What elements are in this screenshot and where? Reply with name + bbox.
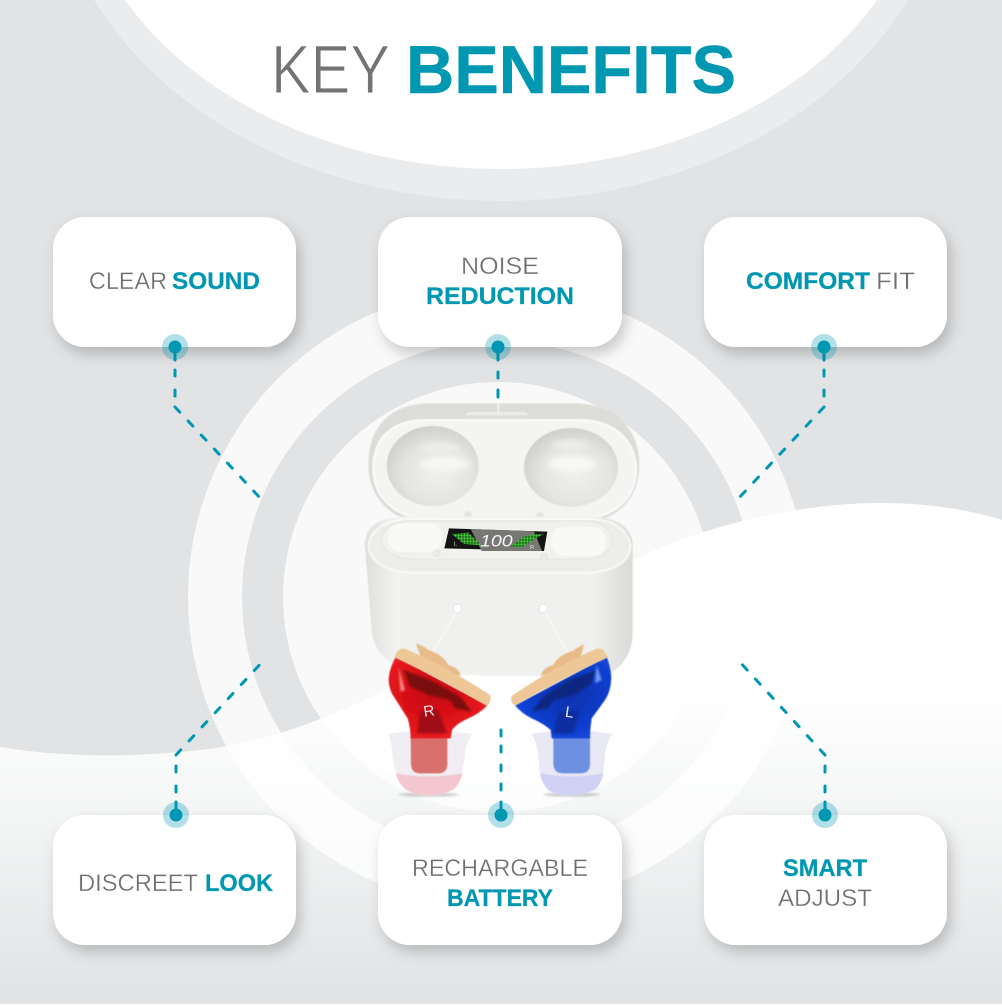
receiver wires [430,604,570,657]
right hearing aid: blue [511,644,612,797]
right hearing aid: blue: L [564,704,575,722]
lid cup right [524,428,618,507]
card: comfort fit: COMFORT [746,268,870,295]
LED display: 100 [480,531,514,550]
connector: noise reduction [496,347,500,397]
card: rechargable battery: BATTERY [447,885,553,912]
product: charging case and hearing aids [365,403,639,797]
case lid [368,403,639,523]
card: noise reduction: REDUCTION [426,283,574,310]
card: clear sound [53,217,296,347]
title: BENEFITS [406,32,736,108]
card: noise reduction [378,217,622,347]
connector: clear sound [175,347,262,500]
connector: comfort fit [737,347,824,500]
card: comfort fit [704,217,947,347]
card: smart adjust: ADJUST [778,885,872,912]
concentric rings [188,287,808,907]
card: clear sound: SOUND [172,268,260,295]
tan faceplate [541,644,584,676]
card: smart adjust [704,815,947,945]
card: discreet look: LOOK [205,870,274,897]
silicone dome [388,730,472,795]
case front panel [400,574,587,673]
card: comfort fit: FIT [876,268,915,295]
connector: rechargable battery [500,730,502,815]
right slot [552,527,605,556]
card: rechargable battery: RECHARGABLE [412,855,588,882]
lid cup left [387,426,479,506]
left slot [388,523,442,552]
card: discreet look [53,815,296,945]
title [271,31,736,108]
LED display: L [454,542,457,548]
card: clear sound: CLEAR [89,268,167,295]
title: KEY [271,31,390,108]
marker dots [162,334,838,828]
top header ellipses [51,0,951,201]
LED display: R [530,545,534,551]
bottom wave [0,503,1002,1006]
blue shell [515,657,611,738]
card: rechargable battery [378,815,622,945]
silicone dome [531,730,612,795]
left hearing aid: red [388,643,491,797]
card: discreet look: DISCREET [78,870,198,897]
connector: smart adjust [738,660,825,815]
red shell [389,657,487,738]
card: smart adjust: SMART [783,855,867,882]
card: noise reduction: NOISE [461,253,539,280]
case base [365,511,633,676]
tan faceplate [416,643,461,676]
connector: discreet look [176,660,264,815]
LED display [444,528,547,551]
left hearing aid: red: R [422,702,436,721]
